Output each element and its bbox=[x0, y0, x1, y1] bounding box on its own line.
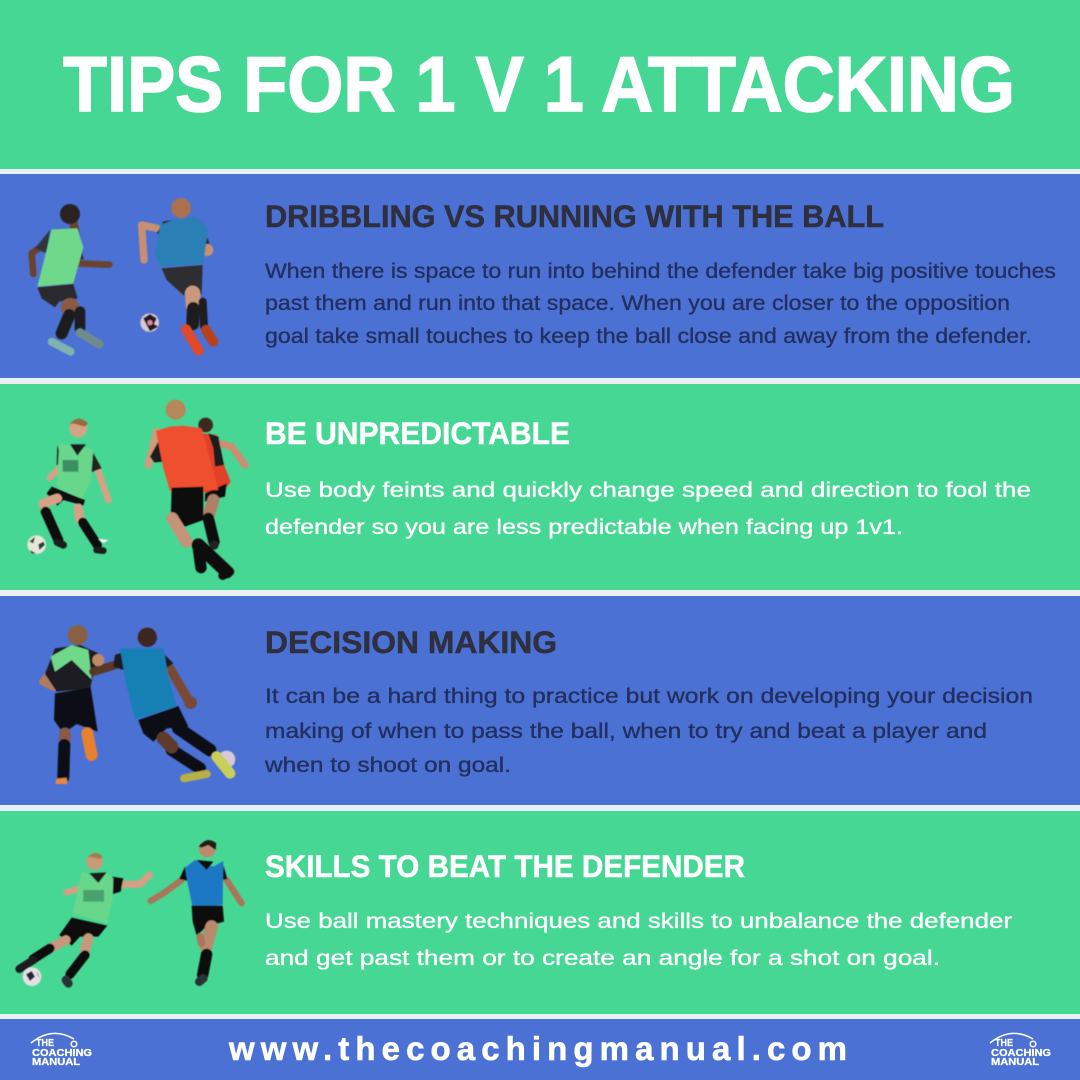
body text: Use ball mastery techniques and skills to unbalance the defender bbox=[265, 910, 1012, 933]
heading: SKILLS TO BEAT THE DEFENDER bbox=[265, 848, 745, 884]
logo: left: THE bbox=[36, 1037, 54, 1049]
panel: decision making bbox=[0, 596, 1080, 805]
body text: past them and run into that space. When you are closer to the opposition bbox=[265, 292, 1010, 315]
logo: right: COACHING bbox=[991, 1047, 1051, 1059]
body text: It can be a hard thing to practice but work on developing your decision bbox=[265, 685, 1033, 708]
header band bbox=[0, 0, 1080, 169]
photo: players with a ball bbox=[27, 400, 245, 576]
body text bbox=[265, 479, 1031, 539]
photo: two players with a ball bbox=[32, 198, 213, 352]
photo: two players with a ball bbox=[19, 840, 242, 986]
panel: dribbling vs running with the ball bbox=[0, 174, 1080, 378]
panel: skills to beat the defender bbox=[0, 811, 1080, 1014]
logo: right: THE bbox=[995, 1037, 1013, 1049]
footer band bbox=[0, 1019, 1080, 1080]
body text: goal take small touches to keep the ball close and away from the defender. bbox=[265, 325, 1032, 348]
body text bbox=[264, 685, 1033, 777]
photo: two players challenging for the ball bbox=[43, 625, 235, 784]
body text: making of when to pass the ball, when to try and beat a player and bbox=[265, 720, 987, 743]
body text: and get past them or to create an angle for a shot on goal. bbox=[265, 947, 940, 970]
logo: left: COACHING bbox=[32, 1047, 92, 1059]
body text: defender so you are less predictable when facing up 1v1. bbox=[265, 516, 903, 539]
logo: right bbox=[990, 1033, 1051, 1068]
body text: Use body feints and quickly change speed and direction to fool the bbox=[265, 479, 1031, 502]
body text bbox=[265, 910, 1012, 970]
panel: be unpredictable bbox=[0, 384, 1080, 590]
body text bbox=[265, 260, 1056, 348]
body text: when to shoot on goal. bbox=[264, 754, 511, 777]
heading: DECISION MAKING bbox=[265, 624, 557, 660]
body text: When there is space to run into behind the defender take big positive touches bbox=[265, 260, 1056, 283]
logo: right: MANUAL bbox=[991, 1056, 1040, 1068]
title: TIPS FOR 1 V 1 ATTACKING bbox=[63, 40, 1015, 128]
heading: BE UNPREDICTABLE bbox=[265, 415, 570, 451]
website address: www.thecoachingmanual.com bbox=[228, 1030, 847, 1067]
logo: left bbox=[31, 1033, 92, 1068]
logo: left: MANUAL bbox=[32, 1056, 81, 1068]
heading: DRIBBLING VS RUNNING WITH THE BALL bbox=[265, 198, 884, 234]
